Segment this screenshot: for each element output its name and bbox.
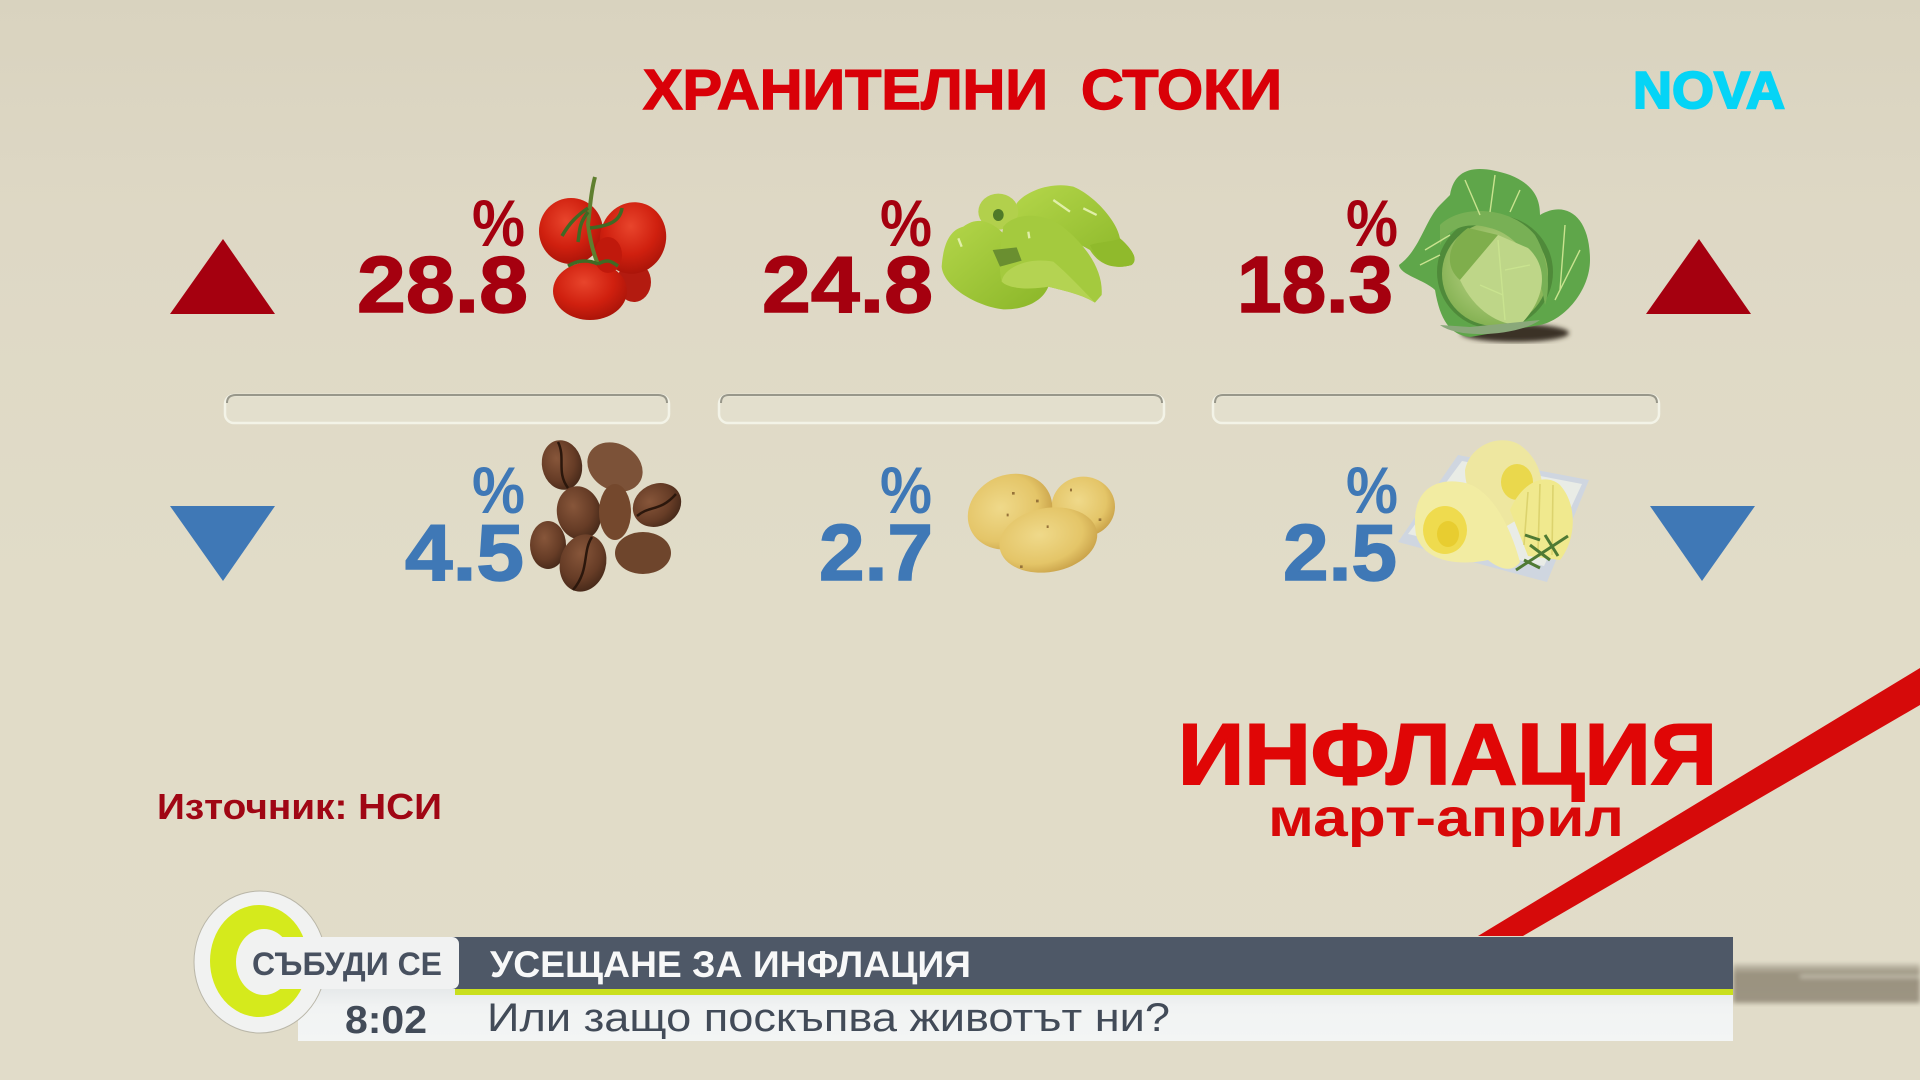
icon: potatoes [955, 460, 1115, 580]
icon: left down arrow [170, 506, 275, 581]
item: tomatoes 28.8% [357, 177, 674, 329]
logo: NOVA: NOVA [1633, 62, 1785, 120]
divider slot 3 [1213, 395, 1659, 423]
headline: inflation: ИНФЛАЦИЯ [1178, 707, 1717, 803]
value: 24.8 [762, 240, 933, 329]
value: 2.7 [819, 508, 933, 597]
ticker subtitle: Или защо поскъпва животът ни? [487, 996, 1170, 1040]
icon: butter dish [1398, 440, 1589, 582]
icon: left up arrow [170, 239, 275, 314]
source note: Източник: НСИ [157, 786, 442, 827]
lower third [194, 891, 1733, 1042]
divider slot 1 top edge [227, 395, 667, 403]
headline text: УСЕЩАНЕ ЗА ИНФЛАЦИЯ [490, 944, 971, 985]
lime stripe [455, 989, 1733, 995]
percent sign: % [472, 186, 525, 260]
item: coffee 4.5% [405, 433, 689, 597]
icon: tomatoes [539, 177, 674, 320]
divider slot 1 [225, 395, 669, 423]
subheading: period: март-април [1268, 788, 1624, 848]
title: ХРАНИТЕЛНИ СТОКИ [643, 58, 1282, 122]
icon: cabbage [1399, 169, 1590, 342]
percent sign: % [1346, 186, 1398, 260]
divider slot 2 top edge [721, 395, 1162, 403]
item: potatoes 2.7% [819, 453, 1115, 597]
value: 18.3 [1237, 240, 1393, 329]
icon: peppers [942, 185, 1135, 309]
value: 28.8 [357, 240, 528, 329]
dark headline bar [450, 937, 1733, 989]
item: butter 2.5% [1283, 440, 1589, 597]
percent sign: % [472, 453, 525, 527]
percent sign: % [1346, 453, 1398, 527]
percent sign: % [880, 453, 932, 527]
value: 2.5 [1283, 508, 1397, 597]
percent sign: % [880, 186, 932, 260]
red diagonal line [1478, 668, 1920, 936]
ticker smear shadow [1733, 964, 1920, 1003]
icon: right down arrow [1650, 506, 1755, 581]
icon: right up arrow [1646, 239, 1751, 314]
item: peppers 24.8% [762, 185, 1135, 329]
divider slot 3 top edge [1215, 395, 1657, 403]
ticker text strip [298, 985, 1733, 1041]
icon: coffee beans [530, 433, 689, 597]
clock: 8:02 [345, 999, 427, 1042]
logo circle [194, 891, 326, 1033]
value: 4.5 [405, 508, 524, 597]
program name: СЪБУДИ СЕ [252, 946, 442, 982]
item: cabbage 18.3% [1237, 169, 1590, 342]
divider slot 2 [719, 395, 1164, 423]
program tab [270, 937, 459, 989]
